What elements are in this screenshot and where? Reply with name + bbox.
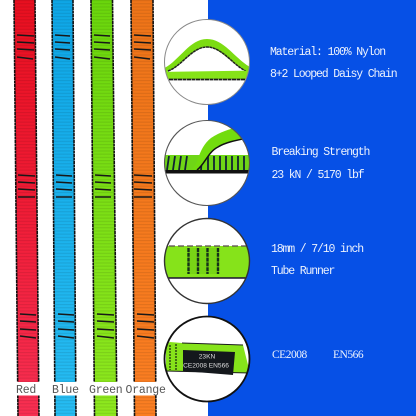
text: certifications: CE2008 bbox=[272, 349, 307, 361]
colour labels: Orange bbox=[126, 384, 166, 397]
text: certifications: EN566 bbox=[333, 349, 364, 361]
detail circle: bar-tack loop bbox=[160, 120, 256, 206]
detail circle: certification tag: 23KN bbox=[199, 354, 215, 360]
strap: blue bbox=[52, 0, 76, 416]
strap: orange bbox=[131, 0, 156, 416]
colour labels bbox=[0, 382, 172, 397]
text: size: Tube Runner bbox=[271, 265, 335, 278]
text: breaking strength bbox=[272, 146, 370, 182]
text: material bbox=[270, 46, 397, 81]
strap: red bbox=[14, 0, 39, 416]
colour labels: Green bbox=[89, 384, 123, 397]
text: breaking strength: 23 kN / 5170 lbf bbox=[272, 169, 365, 182]
colour labels: Blue bbox=[52, 384, 79, 397]
colour labels: Red bbox=[16, 384, 36, 397]
text: material: Material: 100% Nylon bbox=[270, 46, 385, 59]
detail circle: looped strap bbox=[160, 20, 256, 104]
blue background panel bbox=[208, 0, 416, 416]
detail circle: certification tag bbox=[164, 316, 250, 402]
detail circle: strap width bbox=[160, 218, 256, 304]
strap: green bbox=[91, 0, 117, 416]
text: size: 18mm / 7/10 inch bbox=[271, 243, 363, 256]
text: breaking strength: Breaking Strength bbox=[272, 146, 370, 159]
text: certifications bbox=[272, 349, 364, 361]
text: size bbox=[271, 243, 363, 278]
text: material: 8+2 Looped Daisy Chain bbox=[270, 68, 397, 81]
detail circle: certification tag: CE2008 EN566 bbox=[183, 362, 229, 370]
